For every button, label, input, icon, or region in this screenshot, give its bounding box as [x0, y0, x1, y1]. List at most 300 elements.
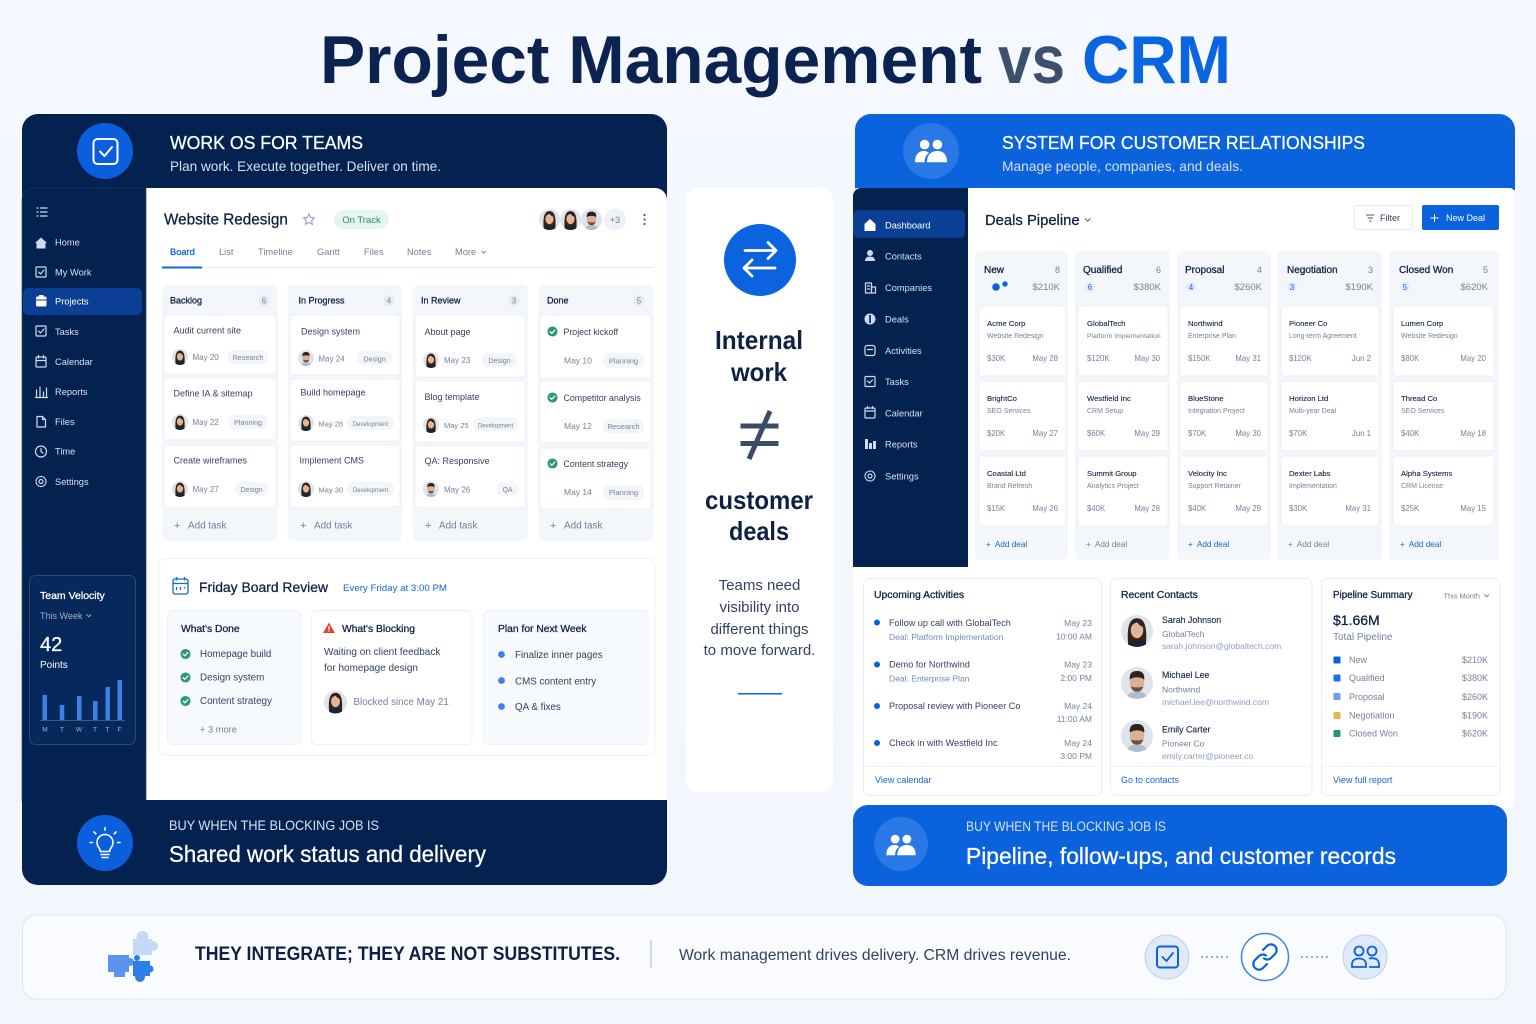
deal card: $40K	[1401, 429, 1420, 438]
nav items: Home	[55, 238, 80, 248]
column: done: Done	[547, 296, 569, 306]
nav items: Reports	[55, 387, 88, 397]
tabs: More	[455, 247, 476, 257]
column: done: 5	[637, 296, 642, 306]
deal card: May 27	[1032, 429, 1058, 438]
deal card: Horizon Ltd	[1289, 394, 1328, 403]
panel: pipeline summary: $1.66M	[1333, 612, 1380, 628]
tabs: Timeline	[258, 247, 293, 257]
deal card: $40K	[1188, 504, 1207, 513]
banner: CRM blocking job	[853, 805, 1507, 886]
deal card: Northwind	[1188, 319, 1223, 328]
bar chart: velocity: F	[118, 726, 122, 734]
header: work OS: Plan work. Execute together. Deliver on time.	[170, 158, 441, 174]
panel: integration bar: THEY INTEGRATE; THEY ARE NOT SUBSTITUTES.	[195, 944, 620, 965]
board header	[164, 208, 646, 230]
task card: May 23	[444, 356, 471, 365]
task card	[415, 381, 525, 442]
deal card: $120K	[1289, 354, 1312, 363]
task card: Design	[363, 354, 386, 364]
deal card: $40K	[1087, 504, 1106, 513]
card: what's done	[168, 610, 301, 744]
column: closed won	[1389, 251, 1499, 560]
deal card: $60K	[1087, 429, 1106, 438]
legend: New	[1349, 655, 1368, 665]
tabs: Notes	[407, 247, 432, 257]
column: in progress: In Progress	[298, 296, 345, 306]
card: what's done: What's Done	[181, 624, 240, 635]
panel: upcoming activities: 10:00 AM	[1056, 632, 1092, 642]
panel: pipeline summary: Total Pipeline	[1333, 632, 1393, 643]
deal card: Pioneer Co	[1289, 319, 1327, 328]
panel: pipeline summary: This Month	[1443, 592, 1480, 600]
legend: Closed Won	[1349, 728, 1398, 738]
card: what's blocking: for homepage design	[324, 663, 418, 674]
nav items: Files	[55, 417, 75, 427]
contact: Emily Carter: emily.carter@pioneer.co	[1162, 751, 1253, 761]
banner: CRM blocking job: Pipeline, follow-ups, and customer records	[966, 843, 1396, 869]
legend: $260K	[1462, 692, 1488, 702]
deal card: $20K	[987, 429, 1006, 438]
panel: upcoming activities: Deal: Enterprise Plan	[889, 674, 970, 684]
panel: center comparison: visibility into	[719, 599, 800, 616]
panel: center comparison: Teams need	[719, 577, 800, 594]
column: qualified: $380K	[1134, 282, 1162, 293]
add task: Add task	[439, 520, 477, 532]
add task: Add task	[188, 520, 226, 532]
task card: QA: Responsive	[424, 456, 490, 466]
deal card: Coastal Ltd	[987, 469, 1026, 478]
card: what's blocking: What's Blocking	[342, 624, 415, 635]
nav items	[35, 238, 93, 487]
deal card	[1078, 306, 1168, 376]
task card: Development	[353, 488, 389, 494]
task card: Build homepage	[300, 388, 366, 398]
deal card	[1078, 456, 1168, 526]
card: team velocity: This Week	[40, 611, 83, 621]
task card: Design	[488, 356, 511, 365]
task card	[290, 315, 400, 375]
task card: May 12	[564, 421, 592, 431]
panel: upcoming activities	[864, 578, 1102, 796]
button: filter	[1354, 206, 1412, 230]
column: in progress	[288, 285, 402, 541]
bar chart: velocity: W	[76, 726, 83, 734]
add task	[300, 520, 352, 532]
column: closed won: 5	[1483, 265, 1488, 275]
column: qualified: Qualified	[1083, 265, 1122, 276]
bar chart: velocity: M	[42, 726, 48, 734]
panel: pipeline summary: Pipeline Summary	[1333, 590, 1413, 601]
deal card: Implementation	[1289, 483, 1337, 490]
contact: Michael Lee	[1121, 667, 1269, 707]
panel: upcoming activities: 3:00 PM	[1060, 751, 1092, 761]
task card	[164, 378, 276, 440]
column: new: New	[984, 265, 1005, 276]
sidebar: Deals	[885, 314, 909, 324]
task card: About page	[424, 327, 471, 337]
panel: center comparison: customer	[705, 485, 813, 515]
column: closed won: 5	[1403, 283, 1408, 292]
deal card: May 31	[1345, 504, 1371, 513]
column: negotiation: Negotiation	[1287, 265, 1338, 276]
task card: May 14	[564, 487, 592, 497]
legend: $210K	[1462, 655, 1488, 665]
panel: upcoming activities: Proposal review with Pioneer Co	[889, 701, 1020, 711]
column: backlog: Backlog	[170, 296, 202, 306]
legend	[1334, 655, 1488, 738]
deal card: Jun 2	[1352, 354, 1371, 363]
deal card: Website Redesign	[1401, 333, 1458, 340]
panel: upcoming activities: May 24	[1064, 701, 1092, 711]
task card: Development	[478, 424, 514, 430]
panel: upcoming activities: 11:00 AM	[1057, 714, 1092, 724]
task card: Content strategy	[564, 459, 629, 469]
deal card: $70K	[1188, 429, 1207, 438]
deal card	[1180, 306, 1268, 376]
task card: Audit current site	[174, 326, 241, 336]
panel: upcoming activities: Check in with Westfield Inc	[889, 738, 998, 748]
panel: upcoming activities: May 23	[1064, 660, 1092, 670]
deal card: May 18	[1460, 429, 1486, 438]
card: plan for next week: CMS content entry	[515, 676, 596, 688]
task card: May 10	[564, 356, 592, 366]
icon: menu	[37, 208, 47, 216]
banner: CRM blocking job: BUY WHEN THE BLOCKING JOB IS	[966, 819, 1166, 834]
deal card	[979, 381, 1066, 451]
sidebar: Tasks	[885, 377, 909, 387]
task card: Planning	[609, 356, 638, 366]
card: plan for next week: Finalize inner pages	[515, 650, 603, 661]
column: proposal	[1177, 251, 1271, 560]
tabs	[162, 247, 654, 268]
icon: warning	[323, 622, 335, 633]
task card: Project kickoff	[564, 327, 619, 337]
task card: Define IA & sitemap	[174, 388, 253, 398]
task card: Competitor analysis	[564, 393, 641, 403]
sidebar: Activities	[885, 346, 922, 356]
pipeline header: Deals Pipeline	[985, 213, 1080, 229]
panel: recent contacts: Go to contacts	[1121, 775, 1180, 785]
nav items: My Work	[55, 268, 92, 278]
sidebar	[853, 188, 968, 567]
task card: Planning	[234, 418, 262, 427]
column: new: $210K	[1033, 282, 1061, 293]
icon: link	[1242, 934, 1288, 980]
sidebar: Reports	[885, 440, 918, 450]
panel: upcoming activities: Deal: Platform Implementation	[889, 632, 1004, 642]
deal card: May 28	[1134, 504, 1160, 513]
column: backlog: 6	[262, 296, 267, 306]
panel: friday board review	[158, 558, 655, 756]
add task	[174, 520, 226, 532]
tabs: List	[219, 247, 234, 257]
badge: on track	[334, 210, 389, 229]
sidebar: Contacts	[885, 252, 922, 262]
column: in review: 3	[512, 296, 517, 306]
task card	[164, 315, 276, 374]
column: qualified: 6	[1156, 265, 1161, 275]
sidebar: Calendar	[885, 408, 923, 418]
deal card: Enterprise Plan	[1188, 333, 1236, 340]
deal card: Dexter Labs	[1289, 469, 1331, 478]
tabs: Board	[170, 247, 195, 257]
contact: Michael Lee: Northwind	[1162, 684, 1201, 694]
button: new deal: New Deal	[1446, 213, 1485, 223]
avatars: +3	[610, 215, 620, 225]
deal card: GlobalTech	[1087, 319, 1125, 328]
nav items: Time	[55, 446, 75, 456]
column: negotiation	[1277, 251, 1382, 560]
add task: +	[300, 520, 306, 532]
icon: checkbox	[77, 123, 133, 179]
column: qualified: 6	[1088, 283, 1093, 292]
deal card: Acme Corp	[987, 319, 1025, 328]
task card: May 24	[318, 354, 345, 364]
add task: Add task	[314, 520, 352, 532]
add task	[550, 520, 602, 532]
deal card: Alpha Systems	[1401, 469, 1452, 478]
task card: May 25	[444, 421, 469, 430]
contact: Sarah Johnson: sarah.johnson@globaltech.com	[1162, 641, 1281, 651]
column: qualified	[1075, 251, 1170, 560]
icon: more	[643, 214, 646, 225]
card: team velocity	[30, 576, 136, 744]
deal card: Westfield Inc	[1087, 394, 1131, 403]
task card: May 26	[444, 486, 471, 494]
panel: center comparison: Internal	[715, 325, 803, 355]
deal card: Analytics Project	[1087, 483, 1139, 490]
contact: Emily Carter	[1121, 720, 1253, 761]
contact: Michael Lee: michael.lee@northwind.com	[1162, 697, 1269, 707]
deal card	[1393, 381, 1494, 451]
panel: upcoming activities: 2:00 PM	[1060, 673, 1092, 683]
column: closed won: Closed Won	[1399, 265, 1453, 276]
sidebar: Dashboard	[885, 220, 930, 230]
deal card: Integration Project	[1188, 408, 1245, 415]
title: Project Management	[320, 22, 982, 98]
contact: Sarah Johnson	[1121, 615, 1281, 651]
column: negotiation: 3	[1290, 283, 1295, 292]
card: what's blocking: Blocked since May 21	[354, 697, 449, 708]
task card: Implement CMS	[300, 456, 364, 466]
deal card: Jun 1	[1352, 429, 1371, 438]
deal card: May 29	[1235, 504, 1261, 513]
header: CRM: Manage people, companies, and deals.	[1002, 158, 1243, 174]
deal card: May 30	[1134, 354, 1161, 363]
banner: work OS blocking job: BUY WHEN THE BLOCKING JOB IS	[169, 817, 379, 833]
column: in review	[412, 285, 528, 541]
icon: not equal	[740, 411, 778, 459]
deal card: Multi-year Deal	[1289, 408, 1337, 415]
task card: Research	[607, 422, 640, 431]
icon: people	[903, 123, 959, 179]
column: backlog	[162, 285, 278, 541]
deal card: Summit Group	[1087, 469, 1137, 478]
panel: pipeline summary: View full report	[1333, 775, 1393, 785]
panel: integration bar	[22, 915, 1506, 999]
header: CRM: SYSTEM FOR CUSTOMER RELATIONSHIPS	[1002, 133, 1365, 153]
column: new	[975, 251, 1068, 560]
column: negotiation: 3	[1368, 265, 1373, 275]
contact: Sarah Johnson: GlobalTech	[1162, 629, 1205, 639]
deal card: SEO Services	[1401, 408, 1445, 415]
panel: upcoming activities: Follow up call with GlobalTech	[889, 618, 1011, 628]
nav: active dashboard	[853, 210, 965, 238]
task card: Development	[353, 422, 389, 428]
deal card: Website Redesign	[987, 333, 1044, 340]
add deal: + Add deal	[1188, 540, 1229, 549]
card: plan for next week: Plan for Next Week	[498, 624, 587, 635]
task card: Create wireframes	[174, 456, 248, 466]
card: what's done: Homepage build	[200, 649, 271, 660]
icon: task	[1145, 935, 1189, 979]
deal card	[1281, 381, 1379, 451]
panel: pipeline summary	[1322, 578, 1500, 796]
bar chart: velocity	[40, 680, 125, 734]
legend: $380K	[1462, 673, 1488, 683]
icon: people	[874, 817, 928, 871]
column: done	[538, 285, 654, 541]
card: team velocity: 42	[40, 634, 62, 656]
task card	[540, 381, 651, 443]
icon: dots	[992, 281, 1008, 291]
bar chart: velocity: T	[93, 726, 97, 734]
avatars	[539, 208, 626, 230]
panel: upcoming activities: May 24	[1064, 738, 1092, 748]
card: team velocity: Team Velocity	[40, 590, 106, 602]
card: plan for next week: QA & fixes	[515, 702, 561, 713]
panel: center comparison	[686, 188, 833, 792]
column: proposal: Proposal	[1185, 265, 1224, 276]
card: what's blocking: Waiting on client feedback	[324, 647, 441, 658]
deal card: Long-term Agreement	[1289, 333, 1357, 340]
icon: puzzle	[108, 931, 158, 982]
card: what's done: Design system	[200, 672, 264, 684]
tabs: Gantt	[317, 247, 340, 257]
card: what's blocking	[312, 610, 472, 744]
legend: Qualified	[1349, 673, 1385, 683]
panel: recent contacts: Recent Contacts	[1121, 590, 1198, 601]
button: new deal	[1422, 205, 1499, 230]
panel: upcoming activities: View calendar	[875, 775, 931, 785]
deal card: $25K	[1401, 504, 1420, 513]
add deal: + Add deal	[1400, 540, 1441, 549]
icon: people outline	[1343, 935, 1387, 979]
panel: center comparison: deals	[729, 516, 789, 546]
task card: May 22	[192, 418, 219, 427]
deal card: $120K	[1087, 354, 1110, 363]
deal card: May 20	[1460, 354, 1487, 363]
add task: +	[174, 520, 180, 532]
deal card: Platform Implementation	[1087, 333, 1161, 340]
task card	[164, 445, 276, 507]
deal card: $150K	[1188, 354, 1211, 363]
app window	[22, 188, 667, 800]
add deal: + Add deal	[1288, 540, 1329, 549]
deal card: $80K	[1401, 354, 1420, 363]
panel: upcoming activities: Upcoming Activities	[874, 590, 964, 601]
nav items: Settings	[55, 477, 89, 487]
column: proposal: 4	[1189, 283, 1194, 292]
column: proposal: 4	[1257, 265, 1262, 275]
deal card	[1281, 306, 1379, 376]
panel: friday board review: Every Friday at 3:00 PM	[343, 583, 447, 594]
bar chart: velocity: T	[60, 726, 64, 734]
column: in review: In Review	[421, 296, 461, 306]
deal card	[1393, 306, 1494, 376]
deal card: BrightCo	[987, 394, 1017, 403]
panel: upcoming activities: Demo for Northwind	[889, 660, 970, 670]
card: what's done: + 3 more	[200, 724, 237, 734]
deal card: Brand Refresh	[987, 483, 1032, 490]
deal card	[1281, 456, 1379, 526]
add deal: + Add deal	[1086, 540, 1127, 549]
contact: Sarah Johnson: Sarah Johnson	[1162, 615, 1221, 625]
nav items: Calendar	[55, 357, 93, 367]
task card: Planning	[609, 488, 638, 497]
pipeline header	[985, 205, 1499, 230]
deal card: May 28	[1032, 354, 1058, 363]
nav: active projects	[23, 288, 142, 315]
task card: May 27	[192, 485, 219, 494]
deal card: SEO Services	[987, 408, 1031, 415]
add task: Add task	[564, 520, 602, 532]
deal card	[1078, 381, 1168, 451]
connector dots	[1301, 956, 1331, 958]
deal card: Support Retainer	[1188, 483, 1242, 490]
legend: Proposal	[1349, 692, 1385, 702]
deal card: CRM License	[1401, 483, 1443, 490]
nav items: Tasks	[55, 327, 79, 337]
card: team velocity: Points	[40, 660, 68, 671]
column: proposal: $260K	[1235, 282, 1263, 293]
board header: Website Redesign	[164, 212, 288, 228]
task card: May 28	[318, 420, 343, 428]
contact: Emily Carter: Emily Carter	[1162, 724, 1210, 734]
legend: Negotiation	[1349, 710, 1395, 720]
contact: Michael Lee: Michael Lee	[1162, 670, 1210, 680]
task card	[540, 448, 651, 509]
task card	[290, 445, 400, 507]
panel: recent contacts	[1110, 578, 1312, 796]
tabs: Files	[364, 247, 384, 257]
panel: center comparison: work	[730, 357, 787, 387]
task card: Design	[240, 485, 263, 494]
task card	[415, 446, 525, 507]
task card: May 20	[192, 353, 219, 362]
panel: upcoming activities: May 23	[1064, 618, 1092, 628]
panel: friday board review: Friday Board Review	[199, 579, 329, 595]
card: what's done: Content strategy	[200, 696, 272, 707]
icon: lightbulb	[77, 815, 133, 871]
panel: center comparison: different things	[710, 621, 809, 638]
sidebar: Companies	[885, 283, 932, 293]
add task	[425, 520, 477, 532]
deal card	[979, 456, 1066, 526]
column: negotiation: $190K	[1346, 282, 1374, 293]
deal card: Thread Co	[1401, 394, 1437, 403]
add deal: + Add deal	[986, 540, 1027, 549]
deal card: $30K	[987, 354, 1006, 363]
deal card: May 15	[1460, 504, 1487, 513]
bar chart: velocity: T	[106, 726, 110, 734]
deal card	[1180, 381, 1268, 451]
card: plan for next week	[484, 610, 648, 744]
deal card: May 29	[1134, 429, 1160, 438]
task card	[290, 379, 400, 441]
header: work OS: WORK OS FOR TEAMS	[170, 133, 363, 153]
